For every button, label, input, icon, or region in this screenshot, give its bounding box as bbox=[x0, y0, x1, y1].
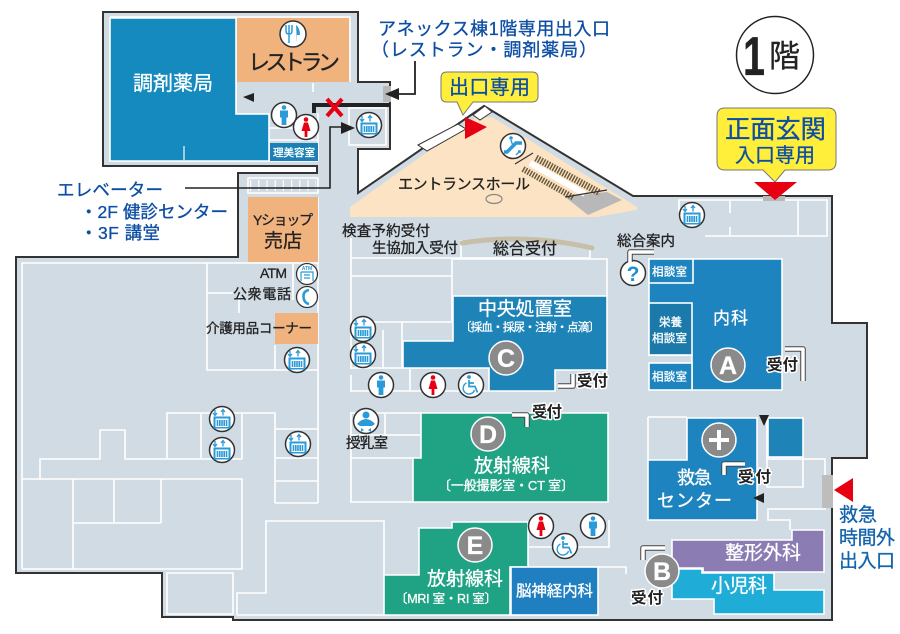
reception D bbox=[512, 402, 562, 427]
floor oval bbox=[486, 194, 502, 204]
room: internal medicine: 栄養 bbox=[659, 315, 682, 329]
label: annex entrance: アネックス棟1階専用出入口 bbox=[378, 19, 610, 39]
room: restaurant: レストラン bbox=[248, 50, 340, 75]
icon: information bbox=[620, 260, 646, 286]
room: Y shop bbox=[248, 197, 318, 262]
icon: restaurant bbox=[280, 21, 306, 47]
icons: south toilets bbox=[528, 514, 606, 558]
icon: ATM: ATM bbox=[302, 266, 312, 272]
labels: reception desks: 授乳室 bbox=[346, 435, 388, 452]
room: pediatrics: 小児科 bbox=[711, 575, 767, 597]
label: after-hours entrance: 時間外 bbox=[839, 527, 895, 549]
arrow: annex pharmacy bbox=[243, 93, 254, 102]
letter marker A: A bbox=[719, 352, 737, 380]
room: restaurant bbox=[237, 18, 349, 82]
floor badge: 階 bbox=[769, 39, 800, 74]
reception D: 受付 bbox=[532, 402, 562, 421]
room: Y shop: Yショップ bbox=[253, 212, 313, 228]
letter marker D: D bbox=[479, 421, 497, 449]
annex walls and blocked path bbox=[243, 86, 391, 116]
icon: ATM bbox=[296, 264, 318, 284]
arrow: emergency west bbox=[753, 493, 764, 503]
room: orthopedics: 整形外科 bbox=[725, 542, 801, 564]
icon: information: ? bbox=[627, 263, 639, 286]
room: internal medicine: 相談室 bbox=[652, 332, 687, 345]
room: neurology: 脳神経内科 bbox=[516, 582, 593, 600]
floor badge: 1 bbox=[743, 25, 765, 87]
room: Y shop: 売店 bbox=[264, 230, 302, 252]
label: care goods corner: 介護用品コーナー bbox=[206, 321, 312, 336]
icon: elevator annex bbox=[356, 112, 382, 138]
room: central treatment: 〔採血・採尿・注射・点滴〕 bbox=[460, 320, 600, 334]
letter marker B bbox=[645, 554, 679, 588]
escalator landing bbox=[565, 192, 622, 215]
icon: telephone bbox=[296, 286, 318, 308]
letter marker C: C bbox=[497, 345, 515, 373]
stairs bbox=[515, 153, 607, 198]
letter marker E: E bbox=[467, 532, 483, 560]
letter marker E bbox=[458, 528, 492, 562]
arrow: annex entrance bbox=[385, 61, 415, 100]
label: public phone: 公衆電話 bbox=[233, 286, 291, 302]
reception emergency bbox=[724, 464, 771, 486]
label: elevator: エレベーター bbox=[57, 180, 163, 200]
room: neurology bbox=[511, 567, 598, 615]
reception emergency: 受付 bbox=[738, 467, 771, 486]
room: radiology D: 〔一般撮影室・CT 室〕 bbox=[438, 478, 574, 493]
callout: main entrance bbox=[717, 108, 836, 182]
reception C bbox=[558, 371, 608, 390]
icon: escalator bbox=[500, 134, 526, 158]
labels: reception desks: 総合案内 bbox=[617, 233, 675, 250]
letter marker D bbox=[471, 417, 505, 451]
room: radiology E: 〔MRI 室・RI 室〕 bbox=[395, 592, 497, 606]
arrow: emergency entrance bbox=[834, 478, 853, 502]
icons: central toilets bbox=[368, 372, 484, 398]
exit door strip bbox=[418, 124, 466, 151]
stripes: stairs near shop bbox=[250, 180, 316, 191]
callout: exit only: 出口専用 bbox=[449, 76, 530, 99]
reception B bbox=[631, 548, 665, 607]
reception B: 受付 bbox=[631, 588, 663, 607]
reception counter bbox=[462, 239, 592, 248]
emergency plus marker bbox=[702, 423, 736, 457]
room: central treatment: 中央処置室 bbox=[478, 298, 572, 320]
labels: reception desks: 総合受付 bbox=[493, 240, 557, 258]
blocked mark bbox=[327, 99, 342, 116]
icon: men toilet annex bbox=[272, 102, 296, 128]
room: emergency annex bbox=[768, 418, 803, 457]
door: main entrance bbox=[763, 196, 785, 201]
room: emergency center: 救急 bbox=[677, 468, 712, 488]
mark: information pointer bbox=[630, 252, 654, 262]
room: internal medicine: 内科 bbox=[713, 309, 748, 328]
icon: nursing room bbox=[354, 408, 378, 434]
label: after-hours entrance bbox=[839, 504, 895, 572]
letter marker B: B bbox=[653, 558, 671, 586]
room: barber bbox=[270, 143, 318, 161]
label: ATM: ATM bbox=[260, 265, 287, 281]
zone: entrance hall bbox=[350, 106, 637, 217]
room: emergency center: センター bbox=[657, 491, 732, 511]
letter marker A bbox=[711, 348, 745, 382]
label: elevator: ・3F 講堂 bbox=[80, 223, 160, 243]
arrow: emergency north bbox=[759, 415, 769, 426]
label: annex entrance bbox=[371, 19, 610, 60]
icons: elevators bbox=[210, 316, 376, 462]
labels: reception desks bbox=[342, 223, 675, 452]
door: emergency entrance bbox=[822, 475, 833, 508]
room: radiology E bbox=[384, 522, 528, 615]
label: after-hours entrance: 出入口 bbox=[839, 550, 895, 572]
arrow: exit bbox=[465, 117, 487, 139]
room: pharmacy: 調剤薬局 bbox=[133, 72, 213, 95]
callout: exit only bbox=[441, 72, 538, 115]
room: internal medicine: 相談室 bbox=[652, 370, 687, 384]
label: entrance hall: エントランスホール bbox=[398, 176, 530, 193]
reception C: 受付 bbox=[577, 371, 608, 390]
labels: reception desks: 検査予約受付 bbox=[342, 223, 430, 240]
arrow: elevator bbox=[185, 122, 355, 188]
arrow: main entrance bbox=[754, 182, 797, 200]
room: radiology D: 放射線科 bbox=[474, 455, 550, 477]
room: pediatrics bbox=[672, 569, 824, 614]
label: elevator bbox=[57, 180, 228, 243]
letter marker C bbox=[489, 341, 523, 375]
room: internal medicine: 相談室 bbox=[652, 266, 687, 278]
icon: women toilet annex bbox=[294, 114, 318, 140]
label: elevator: ・2F 健診センター bbox=[80, 202, 228, 222]
callout: main entrance: 入口専用 bbox=[735, 144, 815, 167]
room: pharmacy bbox=[110, 18, 269, 161]
floor badge bbox=[736, 16, 814, 94]
reception A: 受付 bbox=[767, 355, 798, 374]
reception A bbox=[767, 349, 803, 381]
room: central treatment bbox=[403, 296, 607, 391]
icon: elevator front bbox=[680, 202, 704, 228]
room: internal medicine bbox=[649, 259, 782, 390]
entrance door top bbox=[473, 106, 492, 120]
room: radiology E: 放射線科 bbox=[427, 568, 503, 590]
label: annex entrance: （レストラン・調剤薬局） bbox=[371, 40, 597, 60]
label: after-hours entrance: 救急 bbox=[839, 504, 877, 526]
room: barber: 理美容室 bbox=[273, 146, 315, 159]
room: emergency center bbox=[648, 418, 757, 520]
callout: main entrance: 正面玄関 bbox=[725, 116, 826, 144]
room: care goods bbox=[275, 313, 318, 344]
room: radiology D bbox=[413, 413, 608, 502]
labels: reception desks: 生協加入受付 bbox=[372, 240, 458, 257]
room: orthopedics bbox=[672, 530, 824, 572]
